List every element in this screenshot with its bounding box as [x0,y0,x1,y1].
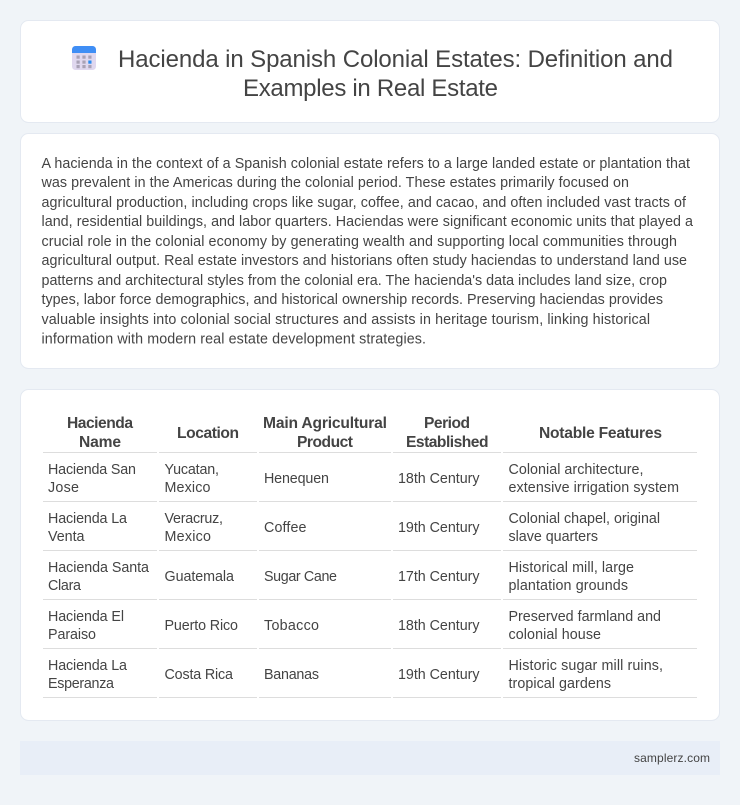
table header: Notable Features [539,425,662,442]
panel: title card [20,20,720,122]
table row: Hacienda La Venta [48,511,660,545]
table row: Hacienda El Paraiso [48,609,661,643]
table header: Period [424,415,470,432]
table row: Hacienda La Esperanza: Hacienda La [48,658,127,674]
table row: Hacienda El Paraiso: Preserved farmland and [508,609,661,625]
table row: Hacienda La Venta: Hacienda La [48,511,127,527]
text block: description: agricultural production, including crops like sugar, coffee, and cacao, and often included vast tracts of [42,195,686,211]
footer: samplerz.com [634,751,710,765]
table row: Hacienda La Esperanza [48,658,663,692]
text block: description: agricultural output. Real estate investors and historians often study haciendas to understand land use [42,253,687,269]
table row: Hacienda La Esperanza: Esperanza [48,676,114,692]
text block: description: land, residential buildings, and labor quarters. Haciendas were significant economic units that played a [42,214,693,230]
table row: Hacienda Santa Clara: Historical mill, large [508,560,634,576]
table row: Hacienda Santa Clara: Guatemala [164,569,234,585]
table row: Hacienda San Jose: Henequen [264,471,329,487]
table header: Location [177,425,239,442]
table row: Hacienda San Jose: Mexico [164,480,211,496]
table row: Hacienda Santa Clara: Hacienda Santa [48,560,149,576]
table row: Hacienda La Venta: Venta [48,529,85,545]
table row: Hacienda La Esperanza: Costa Rica [164,667,233,683]
text block: description: A hacienda in the context of a Spanish colonial estate refers to a large landed estate or plantation that [42,156,690,172]
table header: Main Agricultural [263,415,387,432]
table row: Hacienda El Paraiso: Paraiso [48,627,96,643]
table row: Hacienda San Jose: Hacienda San [48,462,136,478]
table row: Hacienda San Jose: extensive irrigation system [508,480,679,496]
table row: Hacienda El Paraiso: Puerto Rico [164,618,238,634]
table row: Hacienda La Esperanza: 19th Century [398,667,480,683]
table row: Hacienda La Venta: Colonial chapel, original [508,511,660,527]
table row: Hacienda El Paraiso: Hacienda El [48,609,124,625]
table row: Hacienda San Jose: 18th Century [398,471,480,487]
table row: Hacienda La Esperanza: Historic sugar mill ruins, [508,658,663,674]
panel: table card [20,390,720,720]
table row: Hacienda Santa Clara [48,560,634,594]
table header: Established [406,434,488,451]
table row: Hacienda El Paraiso: 18th Century [398,618,480,634]
table header: Name [79,434,121,451]
table header [67,415,662,451]
text block: description: was prevalent in the Americas during the colonial period. These estates primarily focused on [40,175,629,191]
table row: Hacienda La Venta: Mexico [164,529,211,545]
table row: Hacienda Santa Clara: Clara [48,578,81,594]
text block: description: information with modern real estate development strategies. [42,332,426,348]
table row: Hacienda La Esperanza: Bananas [264,667,319,683]
table row: Hacienda El Paraiso: colonial house [508,627,601,643]
panel: description card [20,134,720,368]
table row: Hacienda La Venta: 19th Century [398,520,480,536]
heading [118,46,673,102]
heading: Examples in Real Estate [243,75,498,102]
table header: Product [297,434,353,451]
text block: description: valuable insights into colonial social structures and assists in heritage tourism, linking historical [42,312,650,328]
table row: Hacienda El Paraiso: Tobacco [264,618,319,634]
text block: description: patterns and architectural styles from the colonial era. The hacienda's data includes land size, crop [42,273,667,289]
footer [20,741,720,775]
table row: Hacienda La Esperanza: tropical gardens [508,676,611,692]
text block: description: types, labor force demographics, and historical ownership records. Preserving haciendas provides [42,292,663,308]
table row: Hacienda San Jose: Yucatan, [164,462,219,478]
icon: calendar [72,46,96,70]
table row: Hacienda La Venta: Veracruz, [164,511,223,527]
table row: Hacienda La Venta: Coffee [264,520,307,536]
heading: Hacienda in Spanish Colonial Estates: Definition and [118,46,673,73]
table row: Hacienda Santa Clara: 17th Century [398,569,480,585]
text block: description [40,156,693,348]
table row: Hacienda Santa Clara: plantation grounds [508,578,628,594]
table row: Hacienda San Jose [48,462,679,496]
table row: Hacienda San Jose: Jose [48,480,79,496]
table row: Hacienda San Jose: Colonial architecture, [508,462,644,478]
table row: Hacienda Santa Clara: Sugar Cane [264,569,337,585]
table header: Hacienda [67,415,133,432]
text block: description: crucial role in the colonial economy by generating wealth and supporting local communities through [42,234,677,250]
table row: Hacienda La Venta: slave quarters [508,529,598,545]
